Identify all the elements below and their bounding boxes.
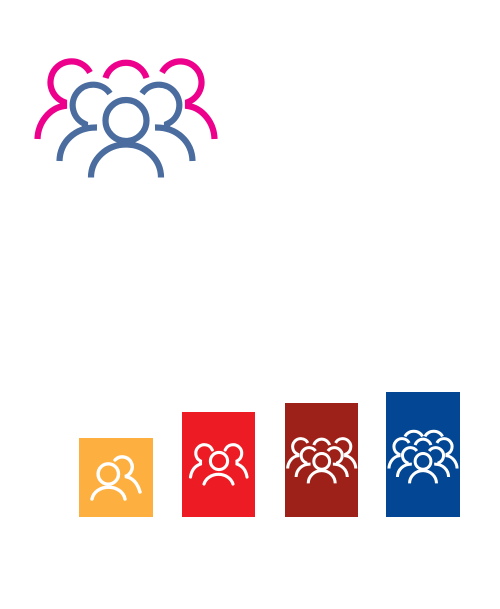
icon: large crowd of people (38, 61, 214, 178)
bar: orange, two people (79, 438, 153, 517)
bar: red, three people (182, 412, 255, 517)
icon: two people (92, 457, 140, 499)
bar: dark red, six people (285, 403, 358, 517)
icon: eight people (389, 431, 457, 483)
bar: dark blue, eight people (386, 392, 460, 517)
icon: six people (288, 439, 356, 483)
front row: blue people (60, 85, 192, 178)
icon: three people (190, 445, 247, 484)
back row: pink people (38, 61, 214, 139)
